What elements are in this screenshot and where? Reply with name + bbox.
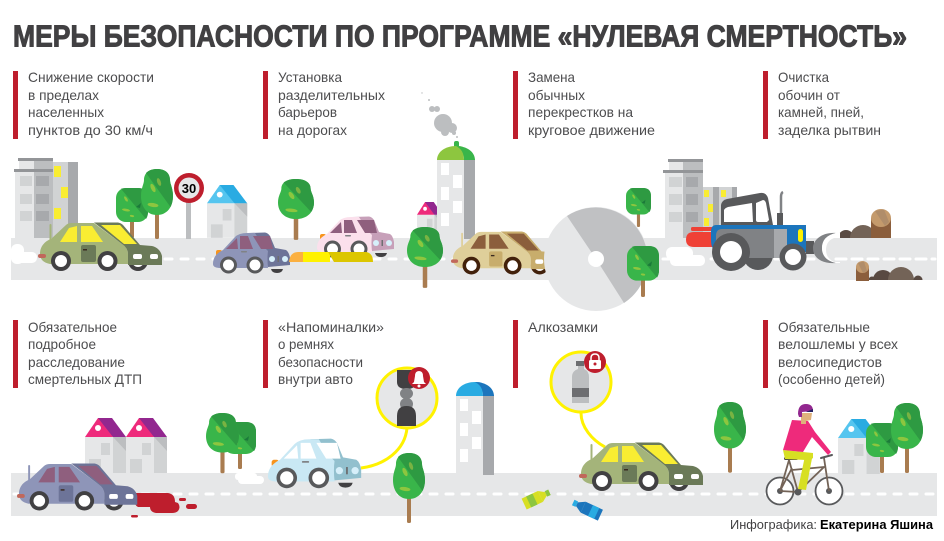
apartment building left	[14, 158, 78, 238]
stumps and rocks upper	[838, 209, 891, 238]
connector line: seat belt	[361, 428, 407, 468]
text block: roundabouts: перекрестков на	[528, 104, 633, 120]
tree	[866, 423, 898, 473]
tree	[627, 246, 659, 297]
text block: alcohol locks	[513, 319, 598, 388]
text block: seat belt reminders: внутри авто	[278, 371, 353, 387]
stump and rocks lower	[856, 261, 922, 281]
text block: investigation: расследование	[28, 354, 125, 370]
text block: seat belt reminders: безопасности	[278, 354, 363, 370]
exhaust cloud	[235, 473, 264, 484]
olive car lower	[579, 442, 703, 491]
exhaust cloud left	[11, 244, 37, 264]
roundabout	[544, 207, 648, 311]
text block: roundabouts: Замена	[528, 69, 575, 85]
tractor	[686, 192, 806, 271]
connector line: alcohol lock	[581, 413, 605, 447]
text block: alcohol locks: Алкозамки	[528, 319, 598, 335]
tree	[407, 227, 443, 288]
speed limit sign 30	[174, 173, 204, 239]
tree	[141, 169, 173, 239]
text block: investigation: смертельных ДТП	[28, 371, 142, 387]
road: bottom row	[11, 473, 937, 516]
tree	[206, 413, 239, 473]
tree	[891, 403, 923, 473]
text block: investigation: Обязательное	[28, 319, 117, 335]
tree	[393, 453, 425, 523]
text block: seat belt reminders	[263, 319, 384, 388]
house blue lower	[838, 419, 880, 474]
light blue car	[268, 439, 361, 488]
text block: roadside clearing	[763, 69, 881, 139]
road clearing blade	[806, 233, 842, 263]
dividing barrier	[289, 252, 373, 262]
text block: investigation	[13, 319, 142, 388]
smoke	[421, 92, 458, 138]
tree	[626, 188, 651, 227]
text block: speed reduction: населенных	[28, 104, 104, 120]
house pink 2	[126, 418, 167, 473]
text block: barriers	[263, 69, 385, 139]
text block: bike helmets: велосипедистов	[778, 354, 882, 370]
text block: speed reduction	[13, 69, 154, 139]
credit: Екатерина Яшина	[820, 517, 934, 532]
pink small car	[317, 216, 394, 258]
speed limit sign 30: 30	[182, 181, 196, 196]
text block: bike helmets: велошлемы у всех	[778, 336, 898, 352]
text block: roadside clearing: заделка рытвин	[778, 122, 881, 138]
text block: roundabouts	[513, 69, 655, 139]
text block: barriers: разделительных	[278, 87, 385, 103]
green bottle	[522, 487, 552, 510]
icon: seat belt callout	[377, 367, 437, 428]
pink house	[417, 202, 442, 239]
tan car	[451, 231, 561, 274]
text block: roadside clearing: Очистка	[778, 69, 829, 85]
text block: roadside clearing: камней, пней,	[778, 104, 864, 120]
text block: investigation: подробное	[28, 336, 96, 352]
blue bottle	[571, 497, 603, 521]
cyclist	[766, 404, 842, 504]
text block: bike helmets	[763, 319, 898, 388]
text block: bike helmets: Обязательные	[778, 319, 870, 335]
dashes over cleared road	[836, 258, 935, 260]
credit: Инфографика:	[730, 517, 817, 532]
crashed car	[17, 463, 137, 511]
olive car	[38, 222, 162, 271]
text block: speed reduction: пунктов до 30 км/ч	[28, 122, 153, 138]
blood stains	[131, 493, 197, 518]
text block: bike helmets: (особенно детей)	[778, 371, 885, 387]
icon: alcohol lock callout	[551, 351, 611, 412]
apartment building right	[663, 159, 737, 238]
tree	[714, 402, 746, 473]
text block: speed reduction: в пределах	[28, 87, 99, 103]
tree	[224, 422, 256, 469]
house pink 1	[85, 418, 126, 473]
tree	[116, 188, 148, 238]
text block: roundabouts: обычных	[528, 87, 585, 103]
text block: speed reduction: Снижение скорости	[28, 69, 154, 85]
house blue	[207, 185, 247, 238]
text block: roundabouts: круговое движение	[528, 122, 655, 138]
text block: roadside clearing: обочин от	[778, 87, 841, 103]
tower green dome	[437, 141, 475, 239]
text block: barriers: на дорогах	[278, 122, 347, 138]
text block: barriers: барьеров	[278, 104, 337, 120]
text block: barriers: Установка	[278, 69, 342, 85]
tree	[278, 179, 314, 240]
blue-grey small car	[213, 232, 290, 274]
snow cloud behind tractor	[666, 247, 705, 266]
road: top row	[11, 238, 937, 280]
tower blue dome	[456, 382, 494, 475]
text block: seat belt reminders: «Напоминалки»	[278, 319, 384, 335]
text block: seat belt reminders: о ремнях	[278, 336, 334, 352]
